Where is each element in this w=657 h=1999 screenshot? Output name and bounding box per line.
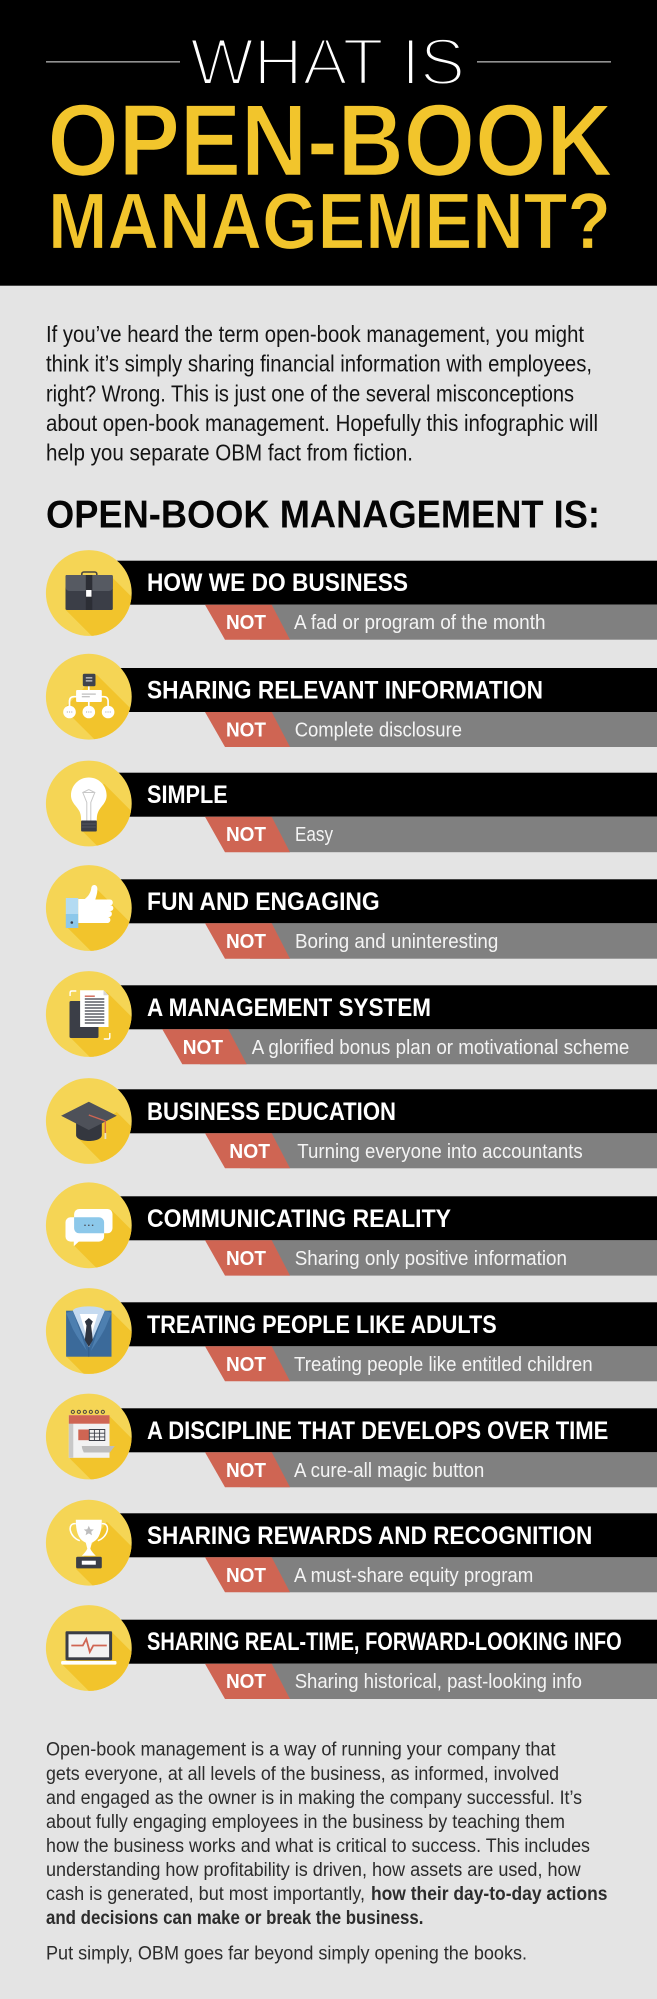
icon: suit and tie (46, 1288, 132, 1374)
closing paragraph: how their day-to-day actions (371, 1884, 608, 1905)
row 5: a management system: NOT (183, 1037, 224, 1059)
icon: graduation cap (46, 1078, 132, 1164)
row 3: simple (46, 760, 657, 852)
row 10: sharing rewards and recognition: NOT (226, 1565, 267, 1587)
icon: briefcase (46, 550, 132, 636)
closing paragraph: Open-book management is a way of running your company that (46, 1740, 556, 1761)
row 5: a management system: A glorified bonus plan or motivational scheme (252, 1037, 629, 1059)
row 6: business education (46, 1078, 657, 1168)
row 6: business education: NOT (229, 1141, 271, 1163)
closing paragraph: about fully engaging employees in the business by teaching them (46, 1812, 565, 1833)
row 1: how we do business: HOW WE DO BUSINESS (147, 570, 408, 597)
intro paragraph: If you’ve heard the term open-book management, you might (46, 321, 585, 347)
row 7: communicating reality (46, 1182, 657, 1276)
closing paragraph: cash is generated, but most importantly, (46, 1884, 365, 1905)
icon: speech bubbles (46, 1182, 132, 1268)
section heading: OPEN-BOOK MANAGEMENT IS: (46, 494, 600, 536)
row 5: a management system: A MANAGEMENT SYSTEM (147, 995, 431, 1022)
row 10: sharing rewards and recognition: A must-share equity program (294, 1565, 533, 1587)
icon: documents (46, 971, 132, 1057)
row 6: business education: Turning everyone into accountants (297, 1141, 583, 1163)
row 8: treating people like adults (46, 1288, 657, 1382)
icon: org chart (46, 654, 132, 740)
closing paragraph: understanding how profitability is driven, how assets are used, how (46, 1860, 581, 1881)
icon: calendar (46, 1394, 132, 1480)
icon: light bulb (46, 760, 132, 846)
icon: thumbs up (46, 865, 132, 951)
row 11: sharing real-time, forward-looking info (46, 1605, 657, 1699)
row 1: how we do business: A fad or program of the month (294, 612, 546, 634)
row 7: communicating reality: Sharing only positive information (295, 1248, 567, 1270)
header banner (0, 0, 657, 286)
icon: trophy (46, 1500, 132, 1586)
intro paragraph: help you separate OBM fact from fiction. (46, 440, 413, 466)
closing paragraph: gets everyone, at all levels of the business, as informed, involved (46, 1764, 559, 1785)
row 7: communicating reality: COMMUNICATING REALITY (147, 1206, 451, 1233)
row 6: business education: BUSINESS EDUCATION (147, 1099, 396, 1126)
row 3: simple: Easy (295, 824, 334, 846)
row 4: fun and engaging: Boring and uninteresting (295, 931, 498, 953)
row 4: fun and engaging (46, 865, 657, 959)
row 10: sharing rewards and recognition (46, 1500, 657, 1592)
row 10: sharing rewards and recognition: SHARING REWARDS AND RECOGNITION (147, 1523, 592, 1550)
row 9: a discipline that develops over time: NOT (226, 1460, 267, 1482)
title: what is: WHAT IS (190, 26, 465, 99)
row 9: a discipline that develops over time: A cure-all magic button (294, 1460, 484, 1482)
row 1: how we do business: NOT (226, 612, 267, 634)
row 9: a discipline that develops over time: A DISCIPLINE THAT DEVELOPS OVER TIME (147, 1418, 608, 1445)
row 11: sharing real-time, forward-looking info: Sharing historical, past-looking info (295, 1671, 582, 1693)
row 7: communicating reality: NOT (226, 1248, 267, 1270)
intro paragraph (46, 321, 598, 466)
row 1: how we do business (46, 550, 657, 640)
row 4: fun and engaging: FUN AND ENGAGING (147, 889, 380, 916)
row 2: sharing relevant information (46, 654, 657, 747)
row 2: sharing relevant information: SHARING RELEVANT INFORMATION (147, 678, 543, 704)
closing paragraph: Put simply, OBM goes far beyond simply opening the books. (46, 1943, 527, 1964)
closing paragraph: and decisions can make or break the business. (46, 1908, 424, 1929)
row 2: sharing relevant information: Complete disclosure (295, 720, 462, 742)
row 8: treating people like adults: TREATING PEOPLE LIKE ADULTS (147, 1312, 497, 1339)
row 3: simple: SIMPLE (147, 782, 228, 809)
closing paragraph (46, 1740, 608, 1964)
row 8: treating people like adults: NOT (226, 1354, 267, 1376)
intro paragraph: right? Wrong. This is just one of the several misconceptions (46, 380, 574, 406)
row 3: simple: NOT (226, 824, 267, 846)
row 9: a discipline that develops over time (46, 1394, 657, 1488)
row 11: sharing real-time, forward-looking info: NOT (226, 1671, 267, 1693)
row 2: sharing relevant information: NOT (226, 720, 267, 742)
intro paragraph: about open-book management. Hopefully this infographic will (46, 410, 598, 436)
icon: laptop with chart (46, 1605, 132, 1691)
closing paragraph: and engaged as the owner is in making the company successful. It’s (46, 1788, 582, 1809)
closing paragraph: how the business works and what is critical to success. This includes (46, 1836, 590, 1857)
row 4: fun and engaging: NOT (226, 931, 267, 953)
intro paragraph: think it’s simply sharing financial information with employees, (46, 351, 592, 377)
row 5: a management system (46, 971, 657, 1064)
row 8: treating people like adults: Treating people like entitled children (294, 1354, 593, 1376)
